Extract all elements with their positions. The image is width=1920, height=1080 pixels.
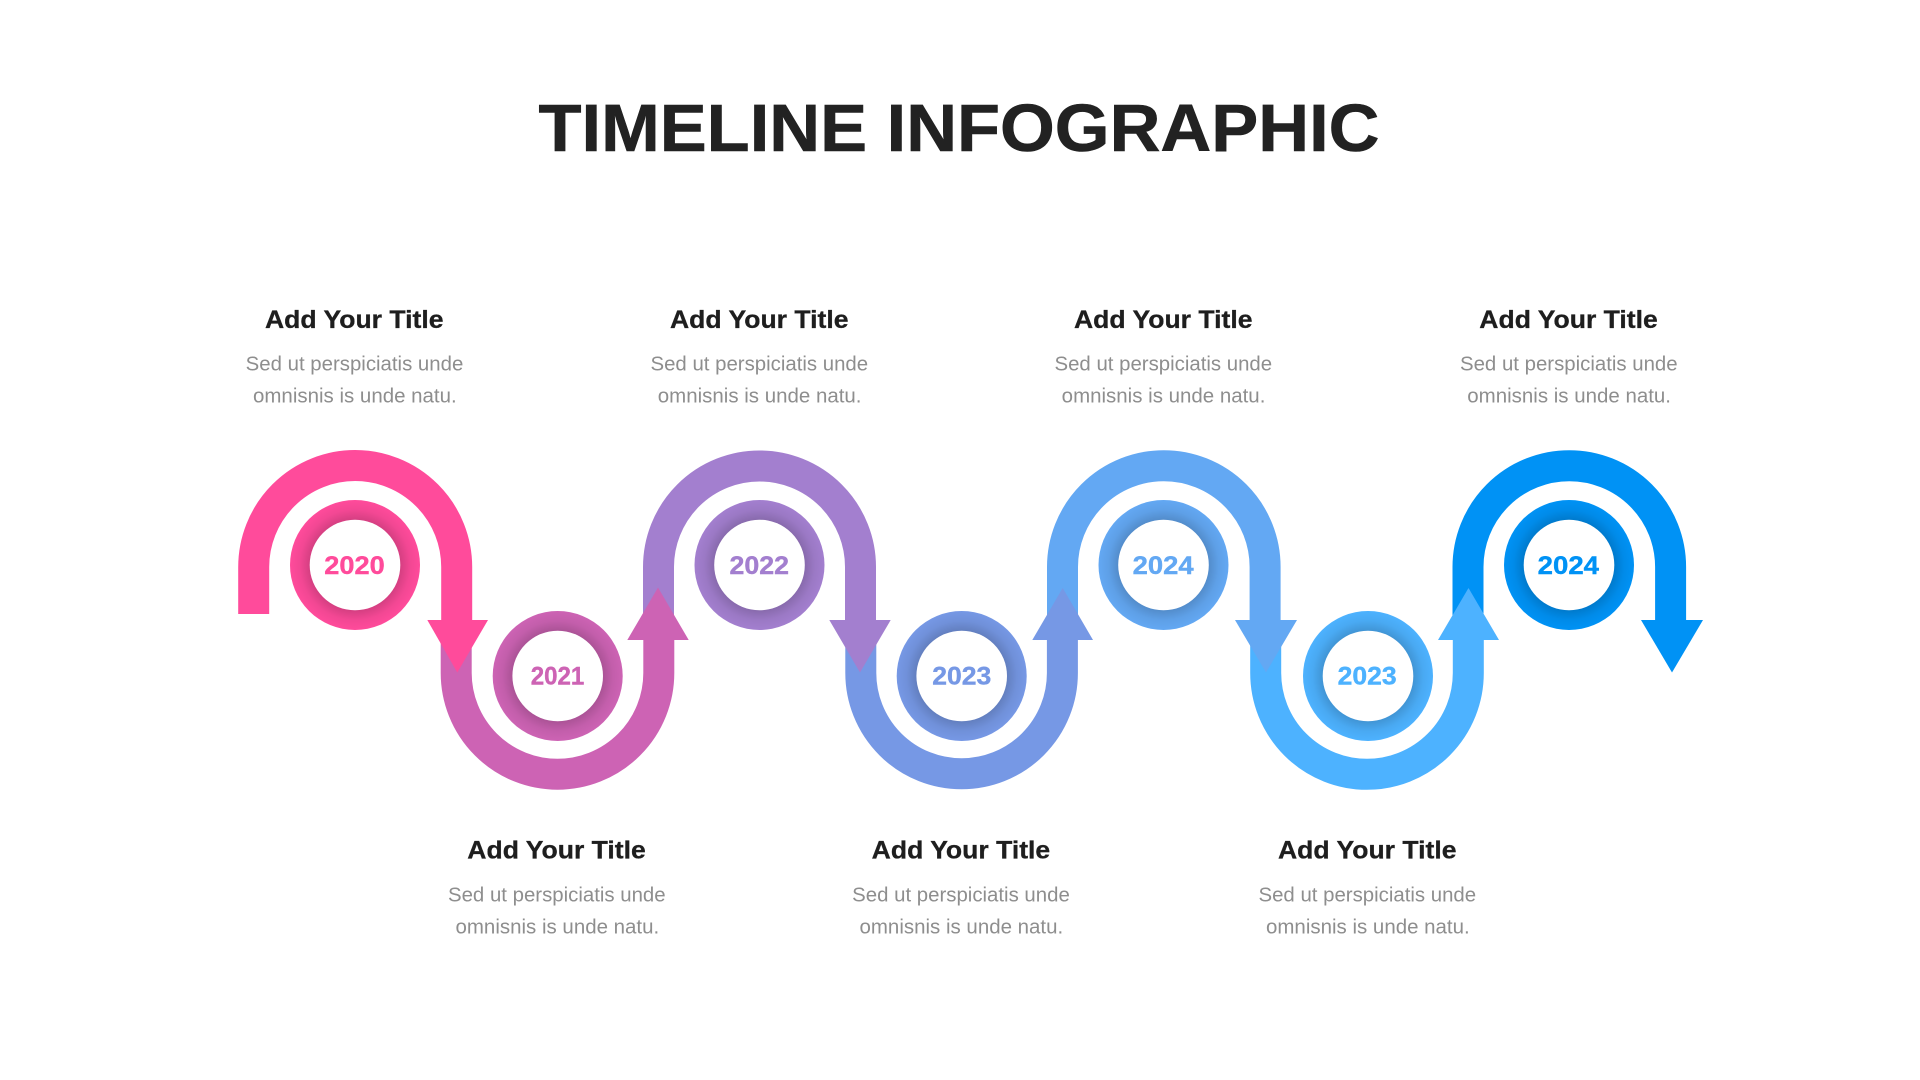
text block: step 2: Sed ut perspiciatis unde [448, 884, 666, 906]
badge: 2023 second: 2023 [1338, 662, 1397, 690]
text block: step 6 [1258, 836, 1476, 938]
badge: 2024 second [1504, 500, 1634, 630]
badge: 2020 [290, 500, 420, 630]
text block: step 7: Sed ut perspiciatis unde [1460, 354, 1678, 376]
badge: 2021 [493, 611, 623, 741]
arrow: step 4 ribbon, periwinkle [861, 588, 1093, 774]
text block: step 4: Add Your Title [872, 836, 1050, 864]
badge: 2024 [1098, 500, 1228, 630]
badge: 2021: 2021 [531, 662, 584, 690]
arrow: step 1 ribbon, pink [254, 466, 488, 672]
text block: step 4 [852, 836, 1070, 938]
badge: 2024 second: 2024 [1538, 552, 1599, 580]
text block: step 1: omnisnis is unde natu. [253, 386, 457, 408]
text block: step 7: omnisnis is unde natu. [1467, 386, 1671, 408]
badge: 2020: 2020 [324, 552, 385, 580]
text block: step 2: omnisnis is unde natu. [456, 916, 659, 938]
text block: step 5: Add Your Title [1074, 306, 1253, 334]
badge: 2023: 2023 [932, 662, 991, 690]
badge: 2022 [694, 500, 824, 630]
text block: step 6: Sed ut perspiciatis unde [1258, 884, 1476, 906]
arrow: step 3 ribbon, purple [658, 466, 891, 672]
text block: step 4: omnisnis is unde natu. [860, 916, 1063, 938]
arrow: step 5 ribbon, sky blue [1062, 466, 1297, 672]
text block: step 1 [246, 306, 463, 408]
text block: step 3 [650, 306, 868, 408]
text block: step 3: omnisnis is unde natu. [658, 386, 862, 408]
text block: step 7 [1460, 306, 1678, 408]
text block: step 1: Add Your Title [265, 306, 444, 334]
text block: step 5 [1054, 306, 1272, 408]
arrow: step 6 ribbon, light blue [1266, 588, 1499, 774]
text block: step 6: omnisnis is unde natu. [1266, 916, 1470, 938]
text block: step 7: Add Your Title [1479, 306, 1658, 334]
title: TIMELINE INFOGRAPHIC [538, 91, 1380, 166]
text block: step 4: Sed ut perspiciatis unde [852, 884, 1070, 906]
text block: step 3: Add Your Title [670, 306, 849, 334]
text block: step 1: Sed ut perspiciatis unde [246, 354, 463, 376]
text block: step 3: Sed ut perspiciatis unde [650, 354, 868, 376]
badge: 2022: 2022 [730, 552, 789, 580]
arrow: step 7 ribbon, blue [1468, 466, 1703, 672]
text block: step 6: Add Your Title [1278, 836, 1457, 864]
text block: step 5: Sed ut perspiciatis unde [1054, 354, 1272, 376]
text block: step 5: omnisnis is unde natu. [1062, 386, 1265, 408]
arrow: step 2 ribbon, orchid [456, 588, 689, 774]
badge: 2024: 2024 [1133, 552, 1194, 580]
badge: 2023 [897, 611, 1027, 741]
text block: step 2 [448, 836, 666, 938]
text block: step 2: Add Your Title [467, 836, 646, 864]
badge: 2023 second [1303, 611, 1433, 741]
